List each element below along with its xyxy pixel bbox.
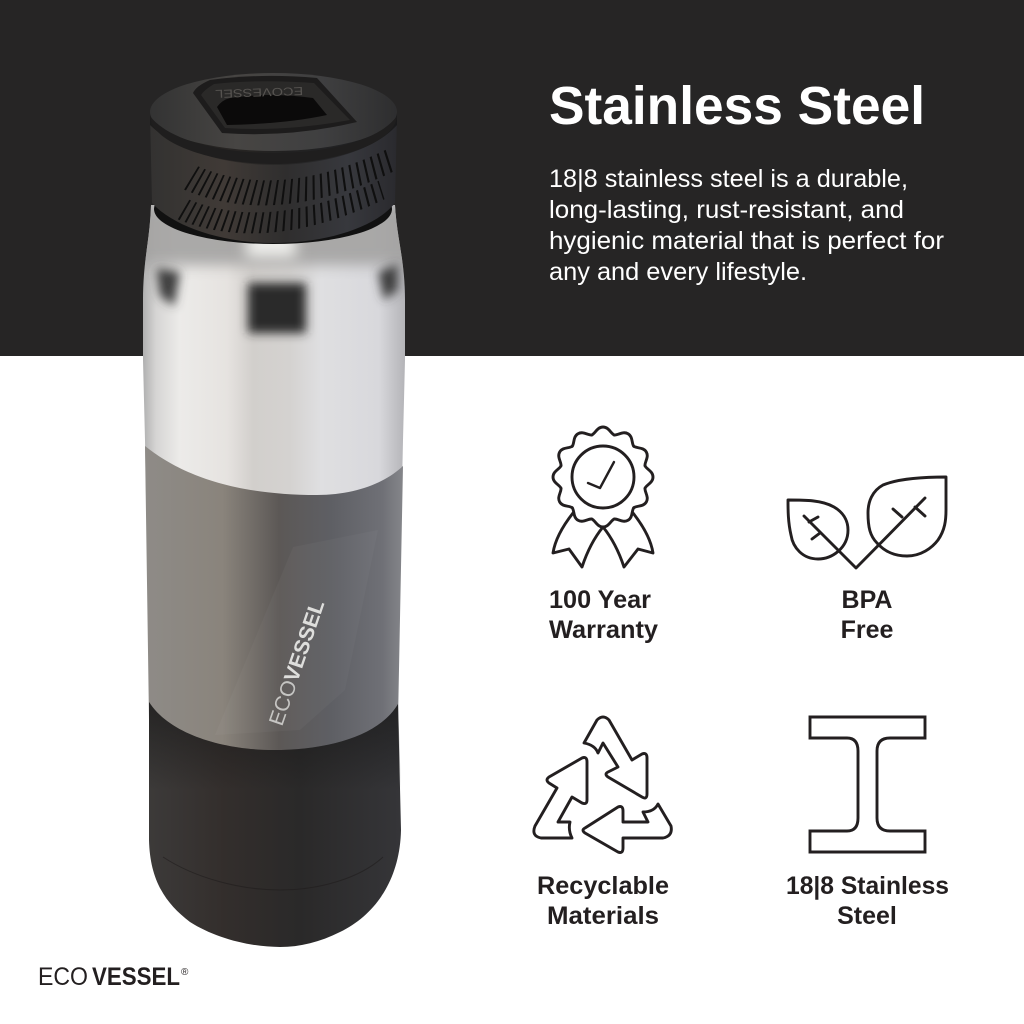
product: water bottle	[130, 73, 420, 947]
description text: long-lasting, rust-resistant, and	[549, 196, 904, 224]
brand logo: ECO	[38, 963, 88, 991]
icon: award rosette	[553, 427, 653, 567]
label: 18|8 Stainless Steel: 18|8 Stainless	[786, 872, 949, 900]
label: 18|8 Stainless Steel: Steel	[837, 902, 897, 930]
lid grip slots	[188, 160, 391, 193]
icon: steel I-beam	[810, 717, 925, 852]
label: BPA Free: Free	[841, 616, 893, 644]
icon: recycling arrows	[534, 717, 671, 852]
label: 100 Year Warranty	[549, 586, 658, 644]
description text: any and every lifestyle.	[549, 258, 807, 286]
lid embossed logo: ECOVESSEL	[214, 84, 303, 99]
label: BPA Free	[841, 586, 893, 644]
brand logo: VESSEL	[92, 963, 180, 991]
label: 100 Year Warranty: 100 Year	[549, 586, 651, 614]
brand logo	[38, 963, 189, 991]
label: Recyclable Materials: Recyclable	[537, 872, 669, 900]
label: BPA Free: BPA	[842, 586, 892, 614]
label: Recyclable Materials	[537, 872, 669, 930]
brand logo: ®	[181, 967, 189, 978]
feature: BPA free	[788, 477, 946, 644]
lid square opening	[193, 76, 357, 134]
feature: recyclable materials	[534, 717, 671, 930]
feature: 18|8 stainless steel	[786, 717, 949, 930]
dark header panel	[0, 0, 1024, 356]
bottle engraved logo: ECOVESSEL	[265, 597, 329, 729]
label: 18|8 Stainless Steel	[786, 872, 949, 930]
bottle black rubber base	[149, 702, 401, 947]
bottle grey painted band	[145, 446, 403, 770]
label: 100 Year Warranty: Warranty	[549, 616, 658, 644]
description text: 18|8 stainless steel is a durable,	[549, 165, 908, 193]
lid	[150, 73, 397, 244]
bottle silver stainless body	[143, 205, 405, 495]
label: Recyclable Materials: Materials	[547, 902, 659, 930]
description text	[549, 165, 945, 286]
icon: two leaves	[788, 477, 946, 568]
description text: hygienic material that is perfect for	[549, 227, 945, 255]
feature: 100 year warranty	[549, 427, 658, 644]
title: Stainless Steel	[549, 77, 925, 136]
